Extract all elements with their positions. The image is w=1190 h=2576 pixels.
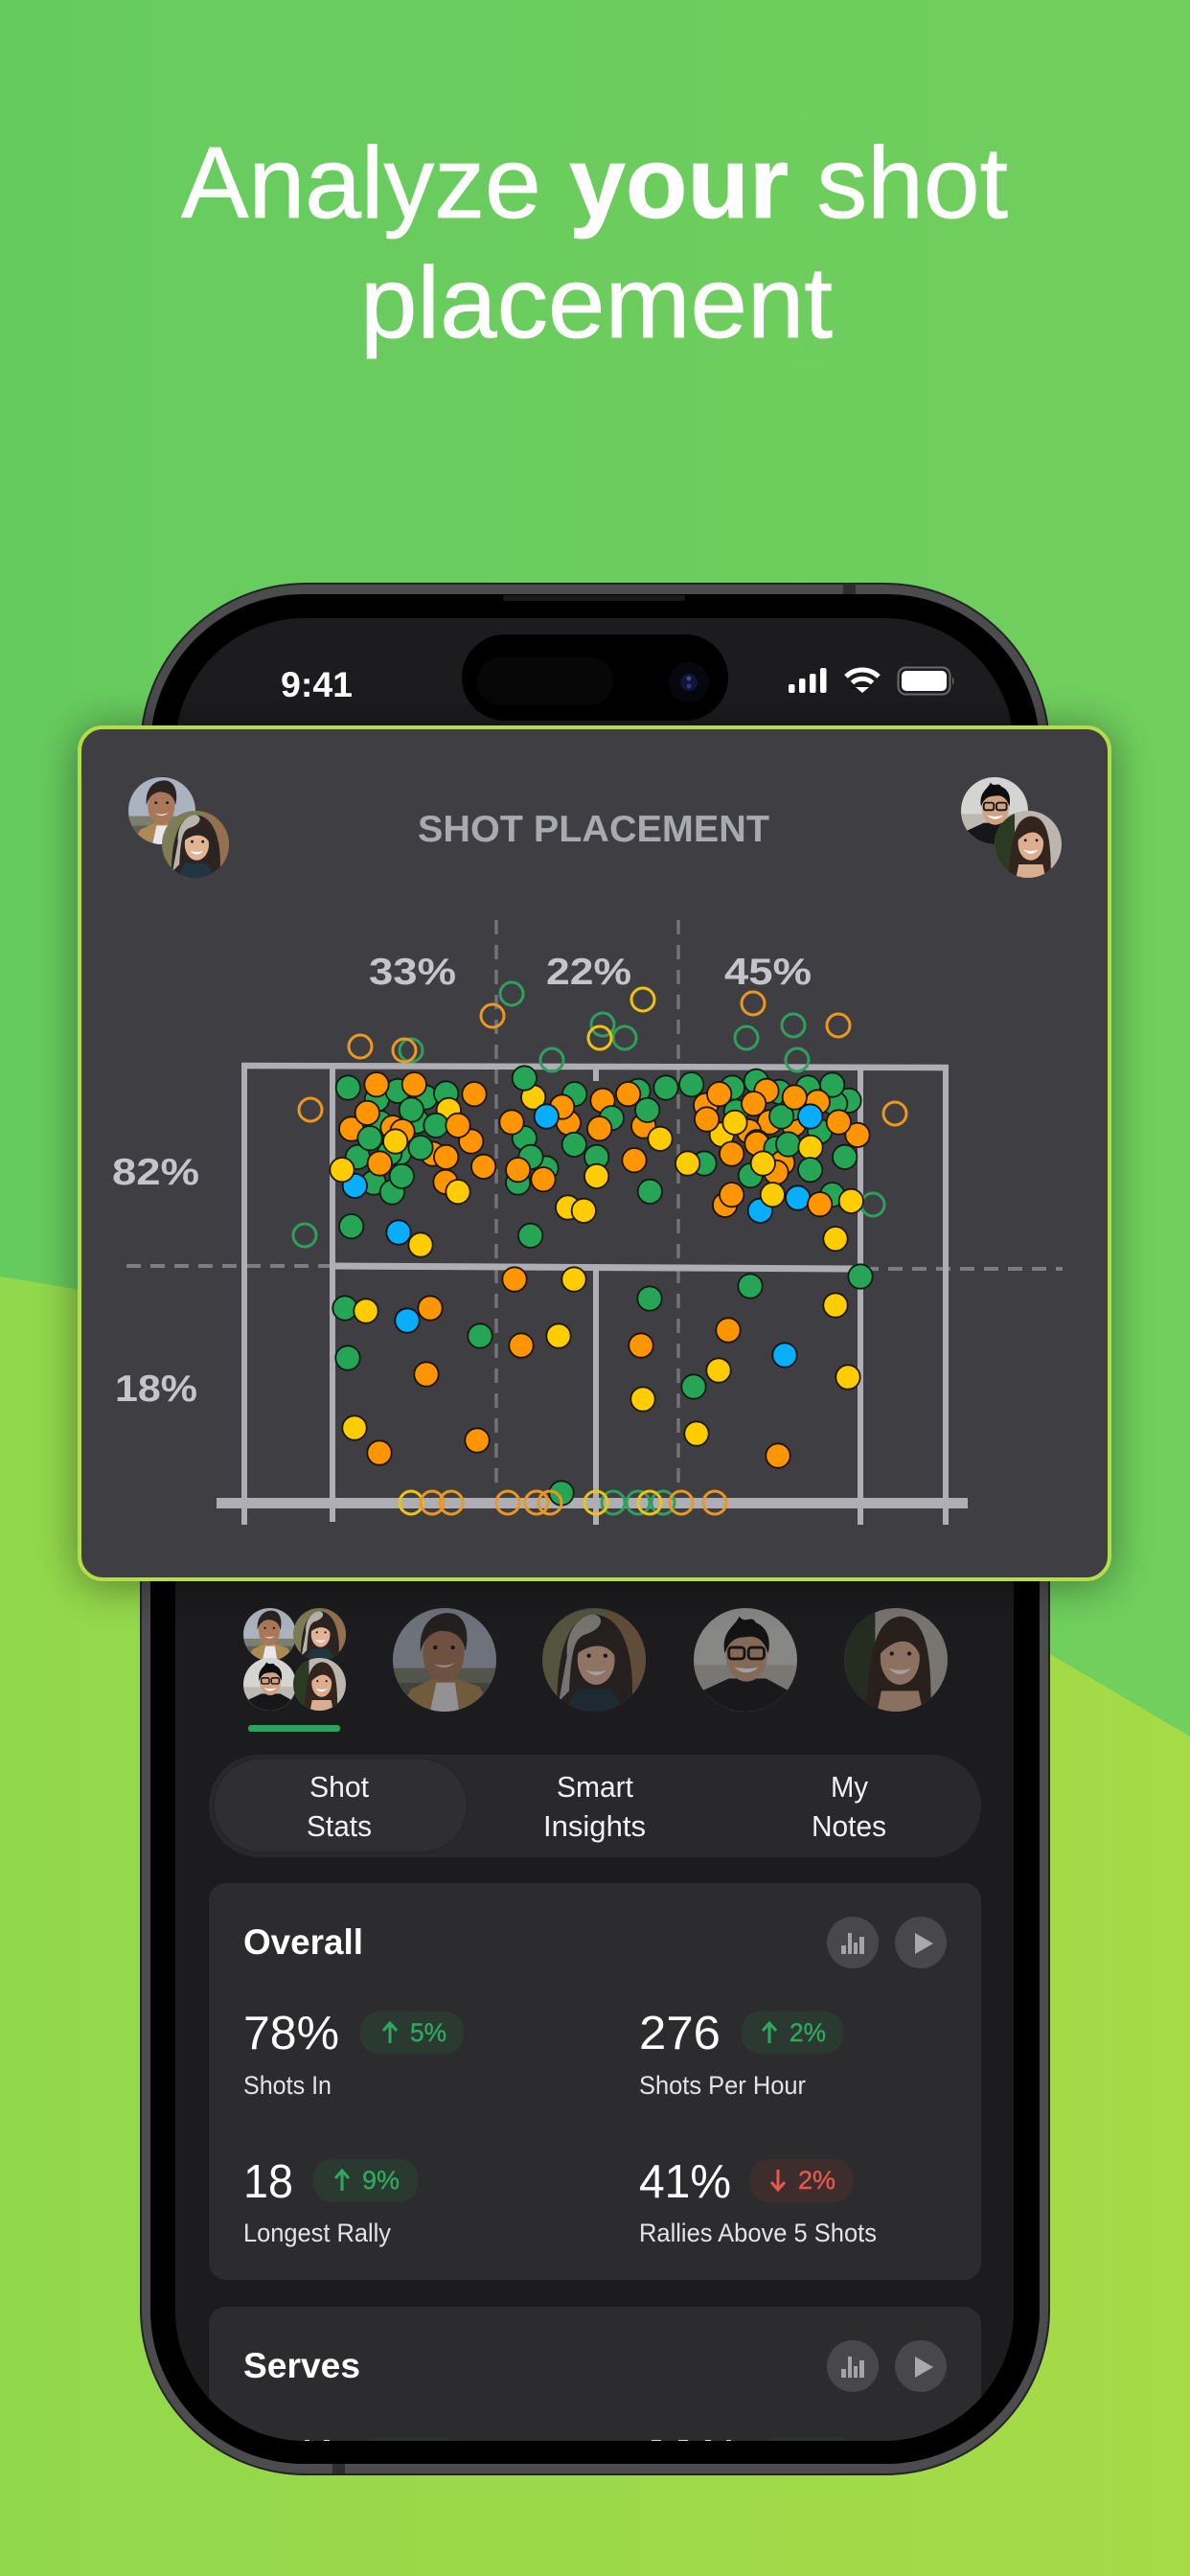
icon: bar chart button — [827, 1917, 879, 1968]
title: placement — [360, 246, 833, 359]
row percentages — [112, 1152, 199, 1410]
shots: right cluster — [616, 1070, 870, 1251]
row percentages: 82% — [112, 1152, 199, 1193]
shots: on baseline — [400, 1491, 726, 1514]
stat: shots per hour: Shots Per Hour — [639, 2071, 806, 2100]
segmented tabs — [209, 1755, 981, 1857]
segmented tabs: My — [831, 1770, 868, 1804]
selected indicator — [248, 1725, 340, 1732]
shots: left cluster — [330, 1072, 495, 1257]
stat: rallies above 5 shots: 2% — [798, 2166, 835, 2195]
stat: shots in: 5% — [410, 2018, 446, 2047]
stat: longest rally — [243, 2156, 418, 2247]
card shadow — [78, 729, 1111, 1585]
segmented tabs: Stats — [307, 1809, 372, 1843]
phone frame — [141, 584, 1049, 2474]
stat: shots in: Shots In — [243, 2071, 332, 2100]
row percentages: 18% — [115, 1368, 197, 1410]
icon: play button — [895, 2340, 947, 2392]
stat: longest rally: 18 — [243, 2156, 293, 2208]
stat: longest rally: Longest Rally — [243, 2219, 391, 2247]
status bar — [281, 634, 954, 721]
stat: longest rally: 9% — [362, 2166, 400, 2195]
phone screen — [175, 618, 1014, 2518]
icon: bar chart button — [827, 2340, 879, 2392]
stat: shots in — [244, 2012, 464, 2095]
title — [181, 126, 1008, 359]
panel: serves — [209, 2307, 981, 2441]
heading: shot placement: SHOT PLACEMENT — [418, 809, 769, 850]
avatars: team one — [128, 777, 229, 878]
column percentages — [369, 952, 812, 993]
clock: 9:41 — [281, 665, 353, 704]
heading: overall: Overall — [243, 1922, 363, 1962]
stat: rallies above 5 shots: Rallies Above 5 Shots — [639, 2219, 877, 2247]
court diagram — [126, 920, 1063, 1525]
stat: shots in: 78% — [243, 2008, 339, 2059]
player avatar row — [243, 1608, 948, 1732]
phone — [141, 584, 1049, 2518]
segmented tabs: Insights — [543, 1809, 646, 1843]
avatars: team two — [961, 777, 1062, 878]
clipped stat row — [305, 2440, 731, 2441]
shots: middle cluster — [499, 1066, 624, 1248]
icon: battery — [899, 667, 954, 694]
segmented tabs: Shot — [309, 1770, 369, 1804]
stat: shots per hour — [640, 2012, 843, 2095]
shots out of bounds — [293, 982, 906, 1247]
icon: play button — [895, 1917, 947, 1968]
title: Analyze your shot — [181, 126, 1008, 240]
icon: signal — [789, 668, 826, 693]
icon: wifi — [846, 670, 879, 693]
avatar group: all four players — [243, 1608, 346, 1711]
heading: serves: Serves — [243, 2346, 360, 2385]
dynamic island — [462, 634, 728, 721]
segmented tabs: Notes — [812, 1809, 886, 1843]
column percentages: 45% — [724, 952, 812, 993]
segmented tabs: Smart — [557, 1770, 633, 1804]
column percentages: 33% — [369, 952, 456, 993]
stat: shots per hour: 2% — [790, 2018, 826, 2047]
panel: shot placement card — [80, 727, 1110, 1579]
shots: service boxes — [332, 1264, 873, 1506]
panel: overall stats — [209, 1883, 981, 2280]
column percentages: 22% — [546, 952, 631, 993]
avatars: individual players dimmed — [393, 1608, 948, 1712]
background: lime swoosh — [0, 1276, 1190, 2576]
stat: shots per hour: 276 — [639, 2008, 721, 2059]
stat: rallies above 5 shots — [639, 2156, 877, 2247]
stat: rallies above 5 shots: 41% — [639, 2156, 731, 2208]
